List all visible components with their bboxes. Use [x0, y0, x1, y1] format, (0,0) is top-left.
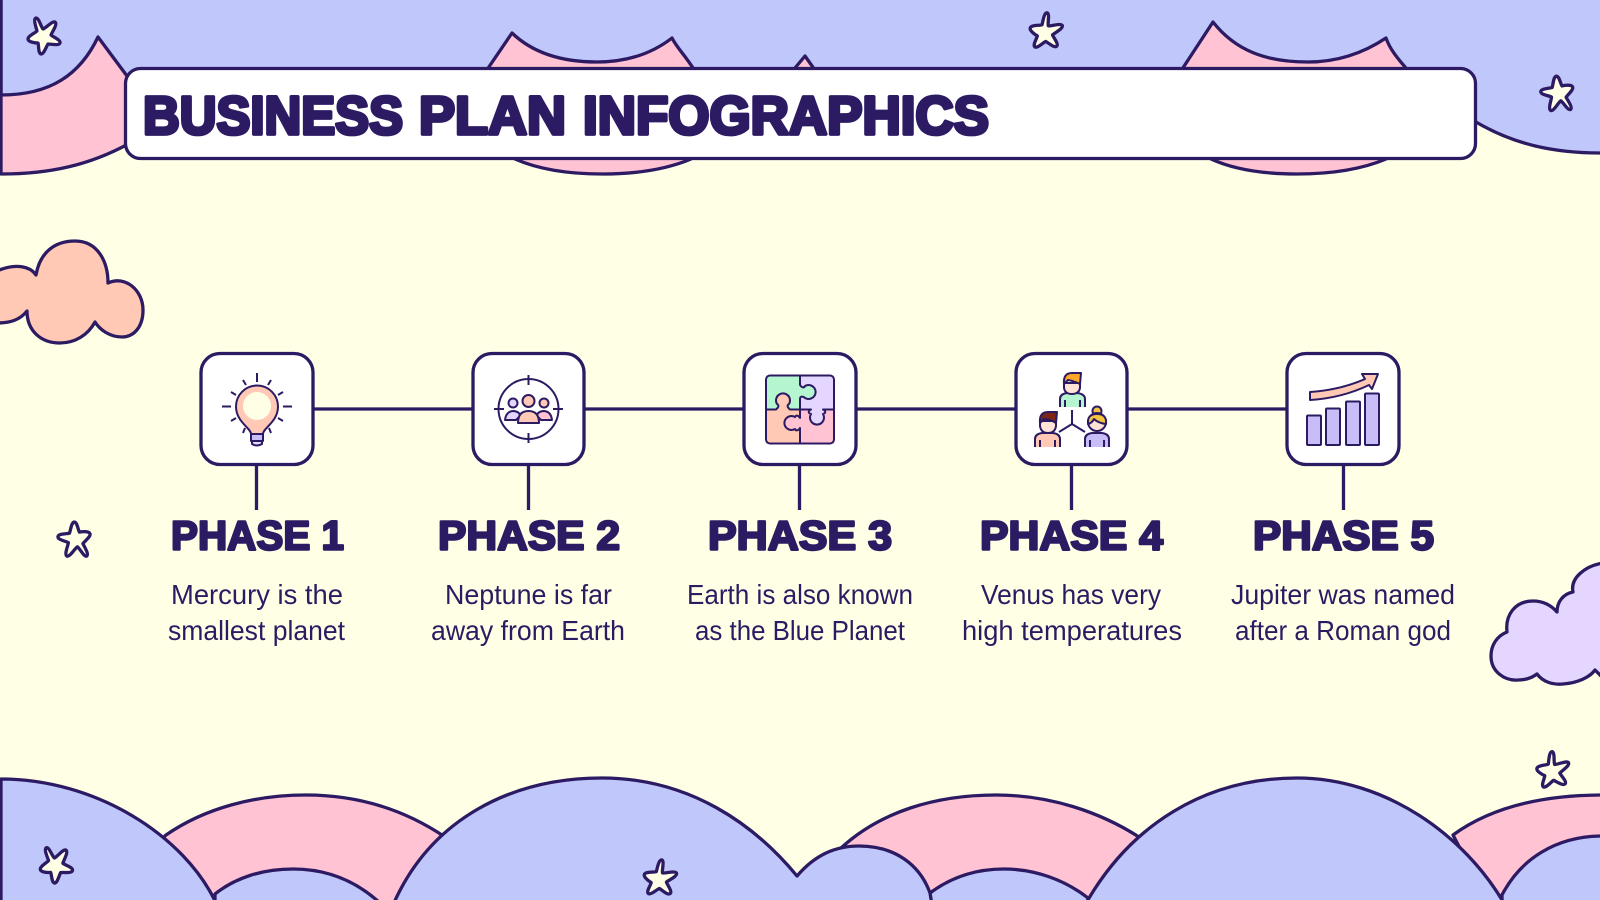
phase 3 description	[687, 579, 913, 646]
icon box 5	[1287, 354, 1399, 464]
phase 5 description: Jupiter was named	[1231, 579, 1455, 610]
star: bottom right	[1531, 749, 1575, 794]
phase 3	[687, 354, 913, 646]
title: BUSINESS	[143, 86, 403, 146]
phase 4 description: high temperatures	[962, 615, 1182, 646]
star: bottom left	[38, 846, 74, 884]
star: left middle	[56, 519, 94, 561]
star: top left	[28, 18, 60, 54]
phase 2 description: Neptune is far	[445, 579, 612, 610]
phase 5 heading: PHASE 5	[1253, 512, 1434, 558]
phase 4	[962, 354, 1182, 646]
phase 1 heading: PHASE 1	[171, 512, 344, 558]
phase 3 description: Earth is also known	[687, 579, 913, 610]
icon: growth chart	[1307, 374, 1379, 445]
cloud: peach left	[0, 241, 143, 343]
title: PLAN	[419, 86, 566, 146]
icon box 4	[1016, 354, 1127, 464]
icon box 1	[201, 354, 313, 464]
icon box 3	[744, 354, 856, 464]
phase 2 description	[431, 579, 625, 646]
phase 5	[1231, 354, 1455, 646]
star: top middle	[1023, 9, 1069, 56]
timeline connector	[256, 409, 1344, 510]
phase 2	[431, 354, 625, 646]
icon: puzzle	[766, 376, 834, 444]
phase 5 description	[1231, 579, 1455, 646]
phase 1 description: smallest planet	[168, 615, 345, 646]
phase 3 description: as the Blue Planet	[695, 615, 905, 646]
icon box 2	[473, 354, 584, 464]
bottom clouds	[1, 778, 1600, 900]
title: INFOGRAPHICS	[583, 86, 989, 146]
phase 4 description	[962, 579, 1182, 646]
phase 1 description: Mercury is the	[171, 579, 343, 610]
icon: target group	[494, 375, 563, 443]
icon: light bulb	[222, 373, 292, 446]
phase 3 heading: PHASE 3	[708, 512, 892, 558]
phase 2 heading: PHASE 2	[438, 512, 620, 558]
phase 2 description: away from Earth	[431, 615, 625, 646]
top banner: clouds	[1, 0, 1600, 174]
star: top right	[1538, 73, 1578, 116]
cloud: lavender right	[1491, 563, 1600, 684]
phase 4 description: Venus has very	[981, 579, 1161, 610]
phase 1	[168, 354, 345, 646]
phase 1 description	[168, 579, 345, 646]
star: bottom middle	[637, 856, 683, 900]
icon: team	[1035, 373, 1109, 447]
title box	[126, 68, 1476, 158]
phase 5 description: after a Roman god	[1235, 615, 1451, 646]
phase 4 heading: PHASE 4	[980, 512, 1163, 558]
